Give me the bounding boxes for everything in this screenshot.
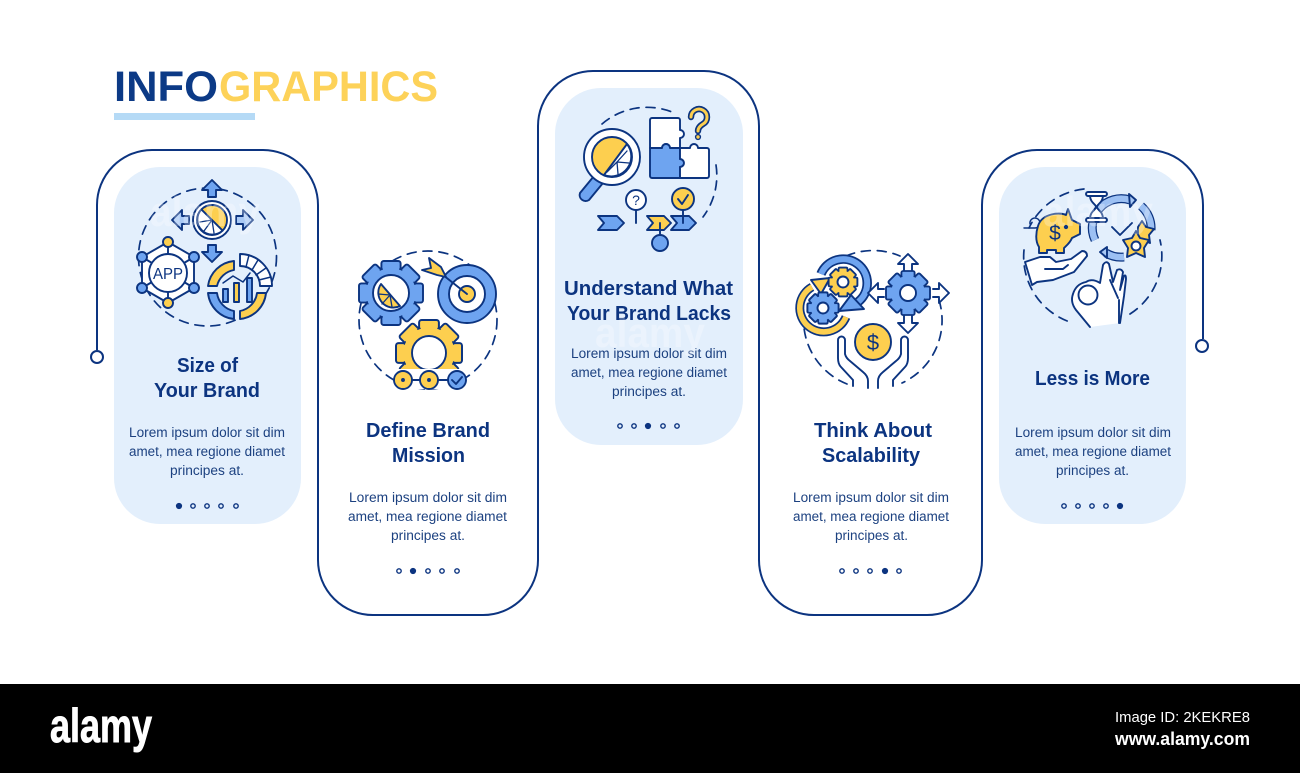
body text (793, 490, 949, 543)
heading: Understand What (564, 278, 733, 300)
heading: Think About (814, 420, 932, 442)
footer bar (0, 684, 1300, 773)
heading: Your Brand (154, 380, 260, 402)
body text: amet, mea regione diamet (793, 509, 949, 524)
icon: scalability: $ (867, 330, 879, 355)
watermark (150, 188, 1154, 356)
icon: scalability (800, 250, 949, 388)
heading (366, 420, 490, 467)
heading: Your Brand Lacks (567, 303, 731, 325)
panel: less is more (999, 167, 1186, 524)
panel: define brand mission (348, 251, 507, 573)
heading: Scalability (822, 445, 921, 467)
body text: amet, mea regione diamet (348, 509, 507, 524)
heading (154, 355, 260, 402)
body text (348, 490, 507, 543)
pagination dots (618, 424, 679, 428)
heading: Mission (392, 445, 465, 467)
heading (564, 278, 733, 325)
body text: Lorem ipsum dolor sit dim (1015, 425, 1171, 440)
body text: principes at. (170, 463, 244, 478)
body text (1015, 425, 1171, 478)
title: GRAPHICS (219, 63, 438, 111)
pagination dots (177, 504, 238, 508)
watermark: alamy (1043, 188, 1154, 235)
panel: understand what your brand lacks (555, 88, 743, 445)
pagination dots (397, 569, 459, 573)
body text: Lorem ipsum dolor sit dim (571, 346, 727, 361)
icon: brand mission (359, 251, 497, 389)
panel: think about scalability (793, 250, 949, 573)
body text: amet, mea regione diamet (129, 444, 285, 459)
body text (571, 346, 727, 399)
watermark: alamy (595, 309, 706, 356)
body text: amet, mea regione diamet (1015, 444, 1171, 459)
body text: Lorem ipsum dolor sit dim (349, 490, 507, 505)
body text: Lorem ipsum dolor sit dim (793, 490, 949, 505)
icon: size of brand: APP (153, 266, 183, 283)
body text: amet, mea regione diamet (571, 365, 727, 380)
body text (129, 425, 285, 478)
icon: less is more (1024, 189, 1162, 327)
body text: principes at. (612, 384, 686, 399)
connecting outline frame (91, 71, 1208, 615)
heading: Size of (177, 355, 238, 377)
pagination dots (840, 569, 901, 573)
title: INFO (114, 63, 218, 111)
icon: brand lacks (580, 107, 717, 251)
title (114, 63, 438, 111)
watermark: alamy (150, 188, 261, 235)
website: www.alamy.com (1114, 729, 1250, 749)
icon: less is more: $ (1049, 222, 1061, 245)
body text: Lorem ipsum dolor sit dim (129, 425, 285, 440)
panel: size of your brand (114, 167, 301, 524)
icon: size of brand (137, 180, 276, 326)
pagination dots (1062, 504, 1122, 508)
body text: principes at. (1056, 463, 1129, 478)
heading: Define Brand (366, 420, 490, 442)
heading (814, 420, 932, 467)
heading: Less is More (1035, 368, 1150, 390)
body text: principes at. (391, 528, 465, 543)
icon: brand lacks: ? (632, 192, 640, 208)
footer logo: alamy (50, 699, 152, 752)
body text: principes at. (835, 528, 908, 543)
title underline (114, 113, 255, 120)
image id: Image ID: 2KEKRE8 (1115, 709, 1250, 726)
